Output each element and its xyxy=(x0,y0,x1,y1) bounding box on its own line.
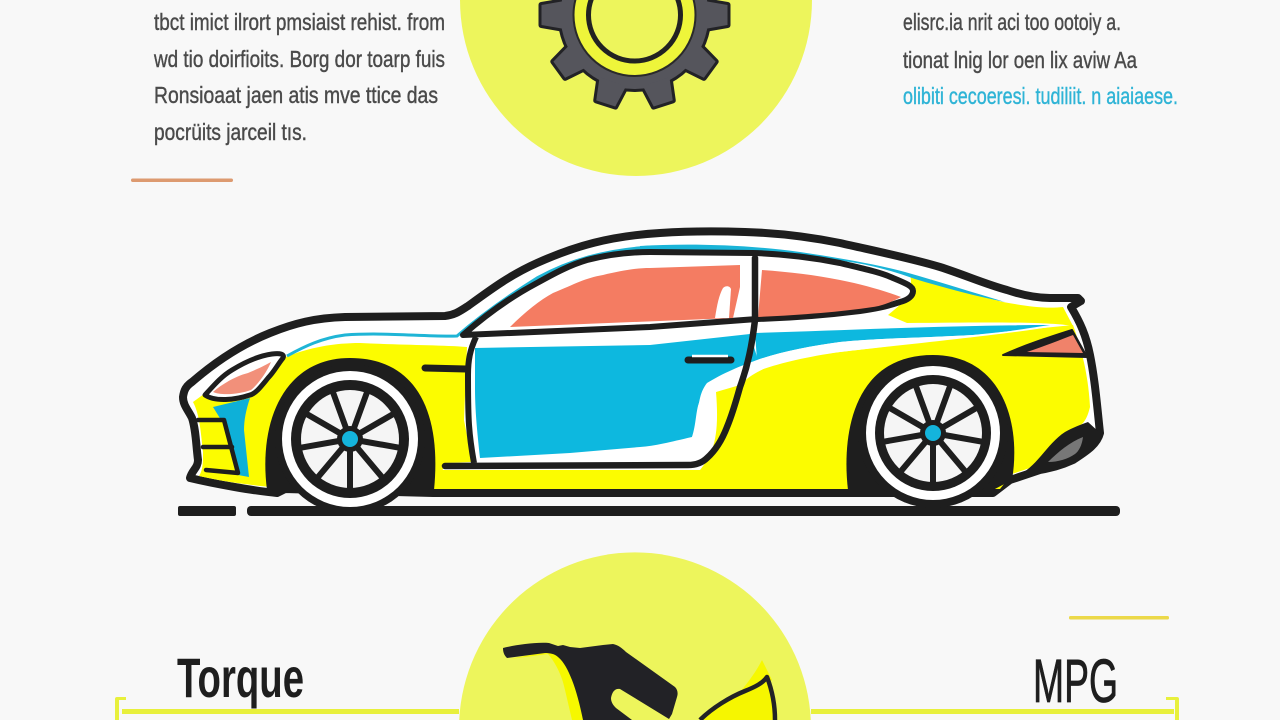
window highlight xyxy=(715,286,731,318)
fuel nozzle xyxy=(503,643,678,720)
rear bumper and diffuser xyxy=(1012,422,1100,477)
yellow front fender xyxy=(193,343,472,489)
text block: top left xyxy=(153,9,445,145)
text block: top right: olibiti cecoeresi. tudiliit. n aiaiaese. xyxy=(903,83,1178,109)
text block: top left: Ronsioaat jaen atis mve ttice das xyxy=(154,82,438,108)
bright yellow highlights xyxy=(510,650,772,720)
divider: orange accent xyxy=(131,178,233,182)
label: Torque: Torque xyxy=(177,646,304,709)
window frame xyxy=(463,252,913,335)
bottom yellow bracket line xyxy=(115,697,1179,720)
text block: top right xyxy=(903,9,1178,109)
door outline xyxy=(445,258,755,466)
leaf xyxy=(700,677,775,720)
door front edge xyxy=(468,337,476,463)
wing mirror crease xyxy=(425,368,466,369)
grille xyxy=(198,420,238,473)
illustration: sports car xyxy=(183,231,1100,514)
text block: top right: elisrc.ia nrit aci too ootoiy a. xyxy=(903,9,1121,35)
text block: top left: wd tio doirfioits. Borg dor toarp fuis xyxy=(153,46,445,72)
tail light xyxy=(1003,330,1087,357)
front blue air intake xyxy=(213,398,250,477)
blue door panel xyxy=(475,334,758,458)
bottom yellow circle xyxy=(459,552,811,720)
car body silhouette xyxy=(183,231,1100,493)
accent line: top of MPG xyxy=(1069,616,1169,620)
yellow upper rear panel xyxy=(888,275,1073,326)
yellow lower band and rear quarter xyxy=(434,325,1090,489)
top yellow circle xyxy=(460,0,812,176)
text block: top right: tionat lnig lor oen lix aviw Aa xyxy=(903,47,1137,73)
front wheel xyxy=(265,358,435,514)
text block: top left: pocrüits jarceil tıs. xyxy=(154,119,307,145)
text block: top left: tbct imict ilrort pmsiaist rehist. from xyxy=(154,9,445,35)
front side window xyxy=(510,265,740,327)
road line xyxy=(178,506,1120,516)
label: MPG: MPG xyxy=(1033,647,1118,715)
cyan rear stripe xyxy=(755,325,1050,360)
cyan hood stripe xyxy=(287,247,650,356)
door handle xyxy=(688,356,731,360)
headlight xyxy=(205,354,283,400)
icon: fuel nozzle with leaf xyxy=(503,643,775,720)
rear side window xyxy=(758,270,901,317)
cyan roof stripe xyxy=(640,245,1005,302)
white stripe below rear cyan xyxy=(692,327,1050,445)
icon: gear xyxy=(542,0,728,108)
rear wheel xyxy=(846,355,1014,508)
